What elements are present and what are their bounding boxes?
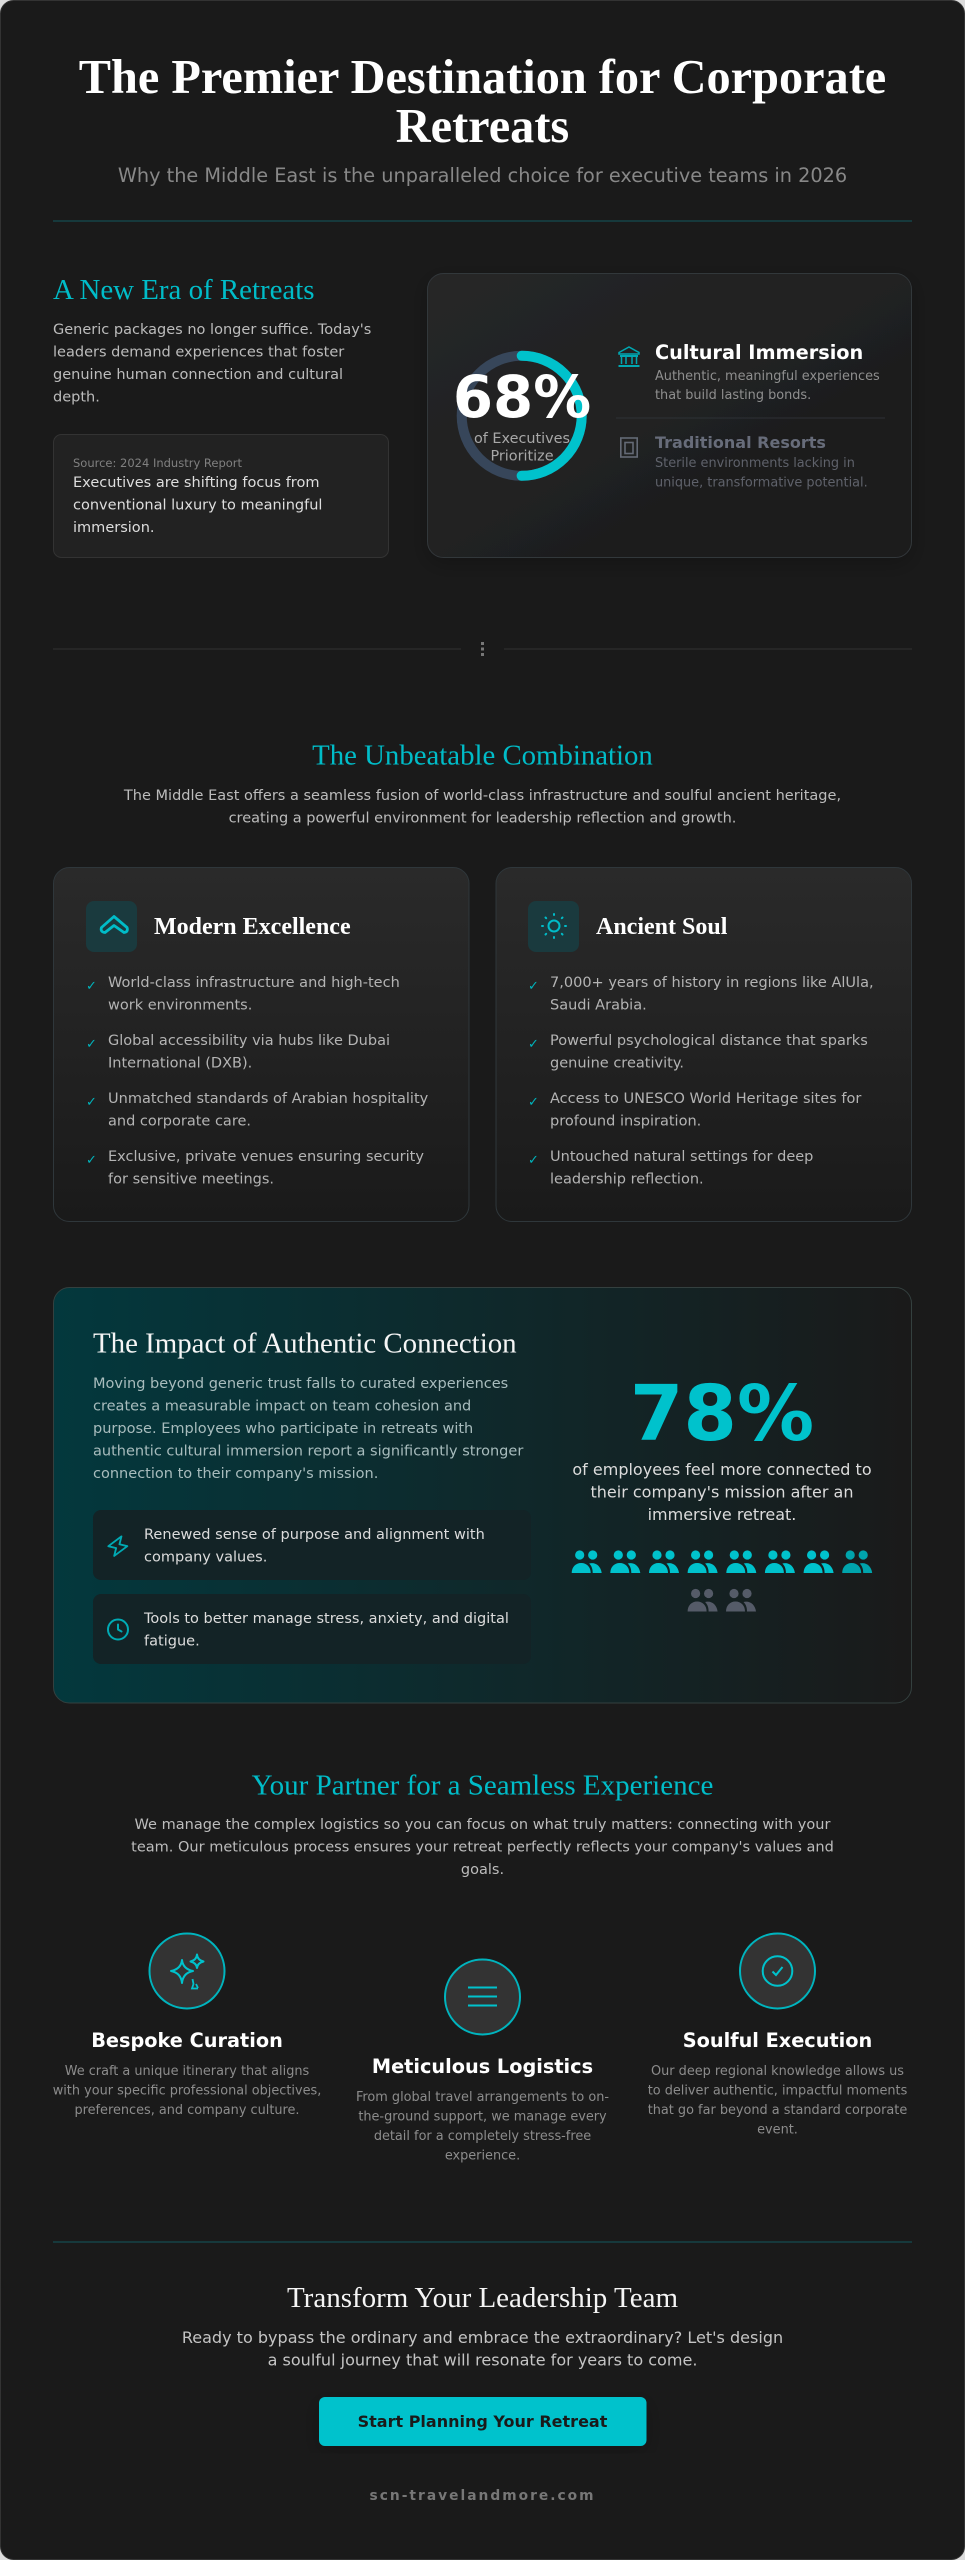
body text: purpose. Employees who participate in retreats with: [93, 1421, 473, 1437]
donut chart: [453, 356, 591, 476]
checklist: Untouched natural settings for deep: [550, 1149, 813, 1165]
section heading: the unbeatable combination: [123, 740, 841, 826]
source callout: Source: 2024 Industry Report: [73, 456, 243, 470]
cta text: a soulful journey that will resonate for years to come.: [268, 2350, 697, 2370]
checklist: ✓: [528, 1095, 539, 1110]
checklist: 7,000+ years of history in regions like AlUla,: [550, 975, 874, 991]
checklist: ✓: [528, 979, 539, 994]
cultural immersion: Authentic, meaningful experiences: [655, 369, 880, 384]
donut chart: Prioritize: [490, 448, 554, 464]
icon: resort building: [621, 438, 637, 457]
checklist: work environments.: [108, 998, 252, 1014]
step: meticulous logistics: [356, 1960, 609, 2164]
benefit: purpose: Renewed sense of purpose and alignment with: [144, 1527, 485, 1543]
intro text: Generic packages no longer suffice. Today's: [53, 322, 371, 338]
intro text: genuine human connection and cultural: [53, 367, 343, 383]
body text: connection to their company's mission.: [93, 1466, 378, 1482]
step: meticulous logistics: Meticulous Logistics: [372, 2055, 593, 2078]
cultural immersion: that build lasting bonds.: [655, 388, 811, 403]
section heading: the unbeatable combination: The Middle East offers a seamless fusion of world-class infrastructure and soulful ancient heritage,: [123, 788, 841, 804]
checklist: Access to UNESCO World Heritage sites for: [550, 1091, 861, 1107]
step: soulful execution: [648, 1934, 908, 2138]
stat caption: of employees feel more connected to: [572, 1460, 872, 1479]
step: bespoke curation: preferences, and company culture.: [74, 2103, 300, 2118]
card heading: Ancient Soul: [596, 914, 728, 940]
button: [319, 2397, 646, 2446]
checklist: ✓: [86, 1153, 97, 1168]
intro text: depth.: [53, 390, 100, 406]
cta text: Ready to bypass the ordinary and embrace the extraordinary? Let's design: [182, 2328, 783, 2347]
step: soulful execution: Our deep regional knowledge allows us: [651, 2064, 904, 2079]
section heading: your partner: team. Our meticulous process ensures your retreat perfectly reflects your company's values and: [131, 1840, 834, 1856]
stat caption: their company's mission after an: [591, 1482, 853, 1502]
checklist: Saudi Arabia.: [550, 998, 647, 1014]
step: meticulous logistics: the-ground support, we manage every: [358, 2110, 607, 2124]
checklist: genuine creativity.: [550, 1056, 684, 1072]
checklist: ✓: [86, 979, 97, 994]
body text: creates a measurable impact on team cohesion and: [93, 1398, 471, 1414]
checklist: for sensitive meetings.: [108, 1172, 274, 1188]
subtitle: Why the Middle East is the unparalleled choice for executive teams in 2026: [118, 164, 847, 187]
stat: 78%: 78%: [630, 1370, 814, 1459]
step: bespoke curation: Bespoke Curation: [91, 2029, 283, 2052]
panel: modern excellence: [54, 868, 469, 1222]
step: bespoke curation: with your specific professional objectives,: [53, 2084, 321, 2098]
section heading: your partner: [131, 1770, 834, 1878]
section heading: the unbeatable combination: The Unbeatable Combination: [312, 740, 653, 772]
icon: sun: [528, 901, 579, 952]
source callout: immersion.: [73, 520, 155, 536]
section heading: your partner: goals.: [461, 1862, 504, 1878]
stat caption: immersive retreat.: [648, 1505, 796, 1524]
step: soulful execution: event.: [757, 2122, 798, 2138]
body text: authentic cultural immersion report a significantly stronger: [93, 1444, 523, 1460]
cultural immersion: Cultural Immersion: [655, 341, 863, 364]
traditional resorts: [655, 433, 868, 490]
step: meticulous logistics: detail for a completely stress-free: [374, 2129, 591, 2144]
source callout: Executives are shifting focus from: [73, 475, 319, 491]
panel: 68% comparison: [428, 274, 912, 558]
panel: impact of authentic connection: [54, 1288, 912, 1703]
cta heading: Transform Your Leadership Team: [287, 2282, 678, 2314]
cultural immersion: [655, 341, 880, 403]
source callout: conventional luxury to meaningful: [73, 498, 322, 514]
checklist: ✓: [528, 1153, 539, 1168]
call to action: [182, 2282, 783, 2446]
checklist: leadership reflection.: [550, 1172, 704, 1188]
intro text: leaders demand experiences that foster: [53, 344, 344, 360]
benefit: stress: [93, 1594, 531, 1664]
people icon row: [572, 1550, 872, 1612]
panel: ancient soul: [496, 868, 912, 1222]
icon: museum: [618, 347, 640, 366]
checklist: [86, 975, 429, 1188]
icon: sparkles: [150, 1934, 224, 2008]
card heading: Modern Excellence: [154, 914, 351, 940]
traditional resorts: Sterile environments lacking in: [655, 456, 855, 471]
step: soulful execution: Soulful Execution: [683, 2029, 872, 2052]
section heading: your partner: We manage the complex logistics so you can focus on what truly matters: connecting with your: [135, 1817, 830, 1833]
checklist: and corporate care.: [108, 1114, 251, 1130]
checklist: ✓: [86, 1095, 97, 1110]
step: bespoke curation: [53, 1934, 321, 2118]
icon: menu lines: [445, 1960, 520, 2034]
donut chart: 68%: [453, 363, 591, 431]
step: soulful execution: to deliver authentic, impactful moments: [648, 2084, 908, 2098]
checklist: Unmatched standards of Arabian hospitality: [108, 1091, 429, 1107]
section heading: the unbeatable combination: creating a powerful environment for leadership reflection and growth.: [229, 810, 736, 826]
section heading: your partner: Your Partner for a Seamless Experience: [252, 1770, 713, 1802]
step: bespoke curation: We craft a unique itinerary that aligns: [65, 2064, 310, 2079]
checklist: profound inspiration.: [550, 1114, 701, 1130]
step: meticulous logistics: From global travel arrangements to on-: [356, 2090, 609, 2105]
title: The Premier Destination for Corporate: [79, 51, 886, 104]
checklist: International (DXB).: [108, 1056, 252, 1072]
donut chart: of Executives: [474, 431, 570, 447]
benefit: stress: Tools to better manage stress, anxiety, and digital: [143, 1611, 509, 1627]
icon: chevron wave: [86, 901, 137, 952]
step: meticulous logistics: experience.: [445, 2148, 520, 2164]
checklist: Powerful psychological distance that sparks: [550, 1033, 868, 1049]
checklist: [528, 975, 874, 1188]
checklist: Global accessibility via hubs like Dubai: [108, 1033, 390, 1049]
step: soulful execution: that go far beyond a standard corporate: [648, 2103, 907, 2118]
section: a new era of retreats: [53, 274, 388, 558]
checklist: ✓: [86, 1037, 97, 1052]
footer url: scn-travelandmore.com: [369, 2488, 596, 2504]
heading: A New Era of Retreats: [53, 274, 315, 306]
checklist: Exclusive, private venues ensuring security: [108, 1149, 424, 1165]
traditional resorts: unique, transformative potential.: [655, 476, 868, 490]
checklist: ✓: [528, 1037, 539, 1052]
benefit: stress: fatigue.: [144, 1634, 200, 1650]
body text: Moving beyond generic trust falls to curated experiences: [93, 1376, 508, 1392]
source callout: [54, 434, 388, 558]
button: Start Planning Your Retreat: [358, 2412, 608, 2431]
header: [79, 51, 886, 187]
icon: check circle: [740, 1934, 815, 2008]
heading: The Impact of Authentic Connection: [93, 1328, 517, 1360]
checklist: World-class infrastructure and high-tech: [108, 975, 400, 991]
title: Retreats: [396, 100, 569, 153]
benefit: purpose: [93, 1510, 531, 1580]
benefit: purpose: company values.: [144, 1550, 267, 1566]
traditional resorts: Traditional Resorts: [655, 433, 826, 452]
dotted divider: [53, 642, 912, 656]
